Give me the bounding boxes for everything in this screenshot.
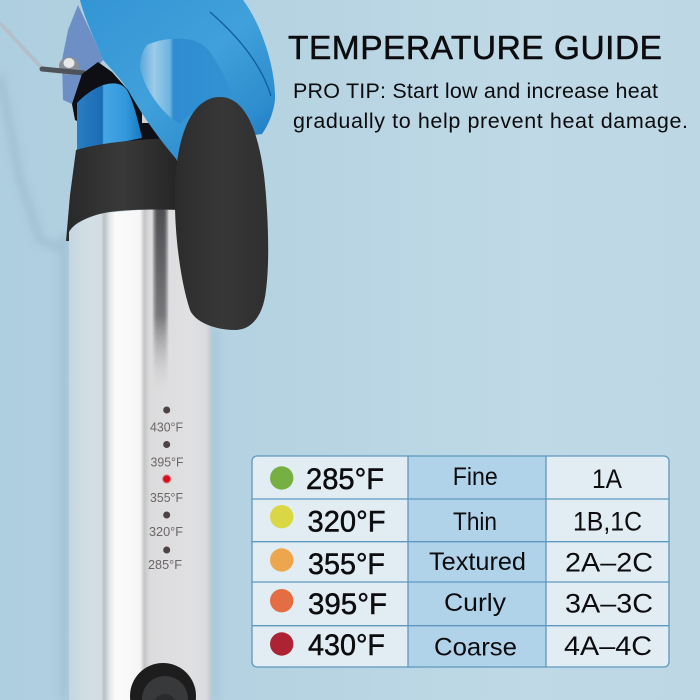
hair type codes: 2A–2C — [565, 548, 653, 578]
recess — [140, 39, 233, 124]
tube — [77, 83, 142, 151]
hair type codes — [564, 464, 653, 661]
shadow behind iron — [0, 75, 219, 700]
temperatures: 285°F — [306, 463, 384, 496]
hair type codes: 4A–4C — [564, 631, 652, 661]
temperatures: 430°F — [308, 629, 385, 662]
hair type codes: 1A — [592, 464, 622, 494]
title: TEMPERATURE GUIDE — [288, 30, 662, 67]
indicator dots — [163, 406, 171, 554]
hood — [80, 0, 275, 160]
hair types — [429, 463, 526, 662]
hair types: Textured — [429, 548, 526, 576]
scale labels: 355°F — [150, 491, 183, 505]
pro tip text — [293, 79, 688, 133]
barrel dark streak — [154, 205, 167, 390]
cord wire — [0, 23, 60, 72]
screw — [42, 57, 84, 75]
scale labels — [148, 420, 184, 572]
scale labels: 320°F — [149, 525, 183, 539]
hair types: Fine — [453, 463, 498, 491]
hair type codes: 3A–3C — [565, 589, 653, 619]
pro tip text: gradually to help prevent heat damage. — [293, 109, 688, 133]
scale labels: 395°F — [150, 456, 184, 470]
barrel — [69, 205, 212, 700]
hair type codes: 1B,1C — [573, 507, 642, 537]
power button — [130, 663, 196, 700]
table grid — [252, 456, 669, 667]
heat colour dots — [270, 466, 293, 656]
hair types: Curly — [444, 589, 507, 617]
temperature table — [252, 456, 669, 667]
pro tip text: PRO TIP: Start low and increase heat — [293, 79, 658, 103]
heater pin — [142, 105, 150, 123]
temperatures: 355°F — [308, 548, 385, 581]
scale labels: 430°F — [150, 420, 183, 434]
curling iron — [0, 0, 275, 700]
scale labels: 285°F — [148, 558, 182, 572]
paddle — [175, 97, 268, 330]
dark arch — [72, 62, 178, 180]
temperatures: 395°F — [308, 588, 387, 621]
collar — [66, 138, 178, 241]
temperature scale on barrel — [148, 406, 184, 572]
hair types: Coarse — [434, 634, 517, 662]
hair type column fill — [408, 456, 546, 667]
table panel — [252, 456, 669, 667]
hood highlight — [210, 12, 271, 96]
hair types: Thin — [453, 508, 497, 536]
temperatures — [306, 463, 387, 662]
bracket — [62, 5, 103, 104]
temperatures: 320°F — [308, 506, 386, 539]
